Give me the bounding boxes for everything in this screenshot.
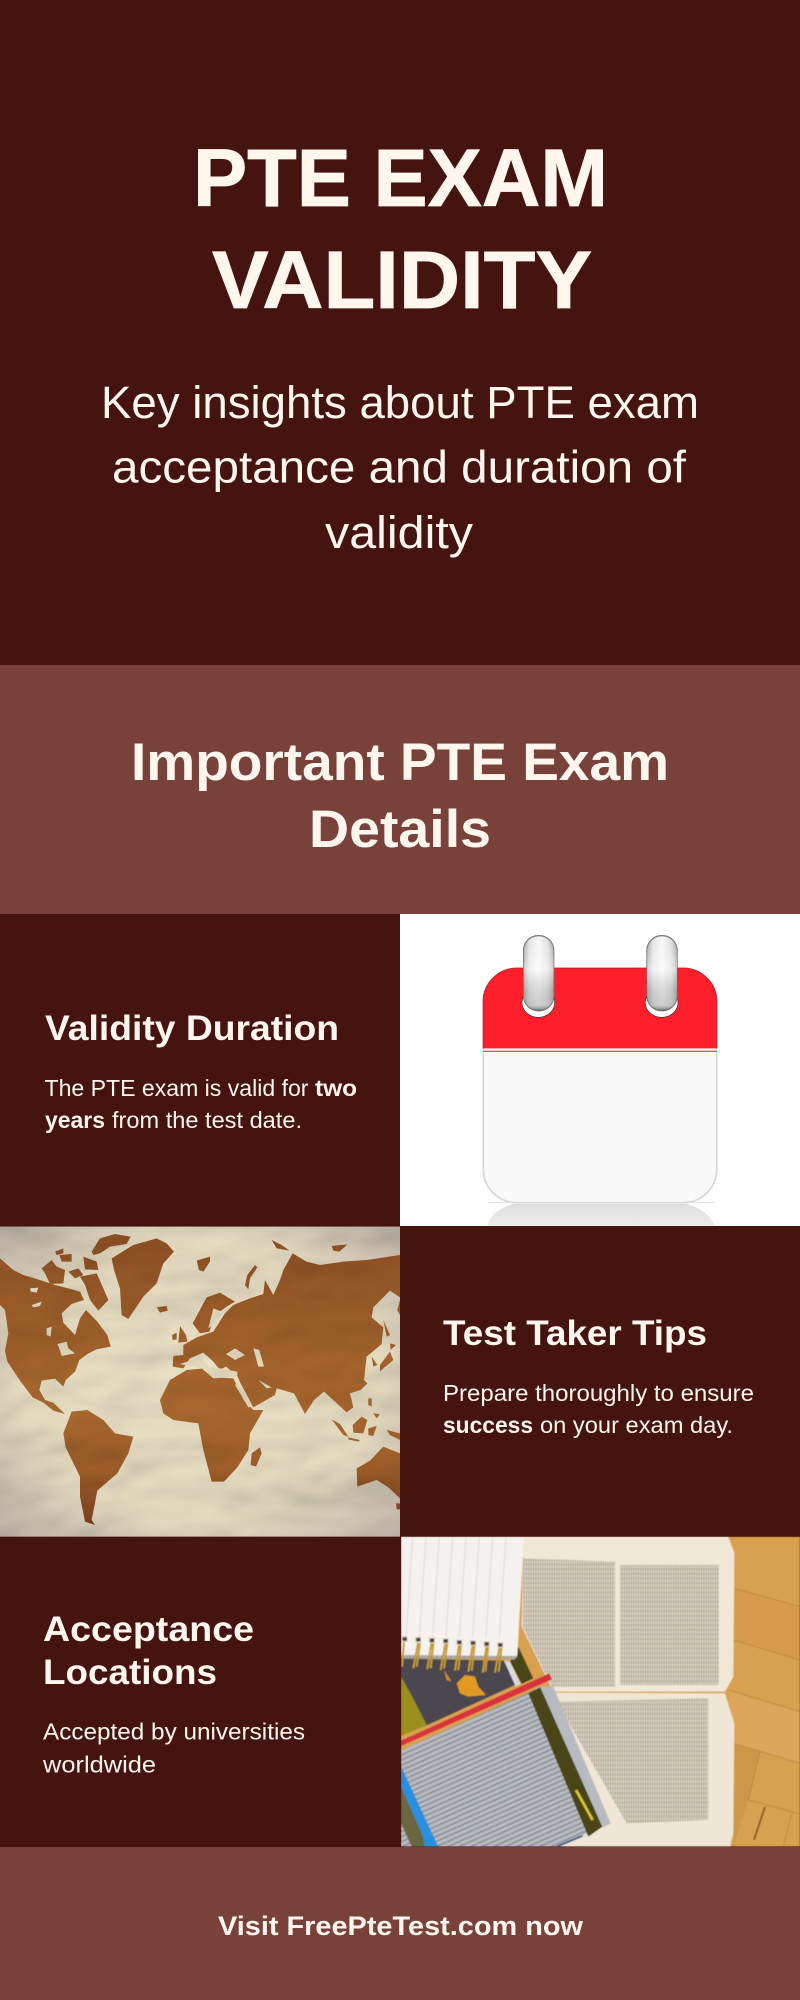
notebook spiral rings [402, 1642, 502, 1673]
text: test taker tips body: success [443, 1412, 533, 1438]
lower book gray page [401, 1686, 588, 1847]
subtitle: Key insights about PTE exam [101, 377, 699, 428]
heading: acceptance locations [43, 1610, 254, 1692]
panel: section heading band [0, 665, 800, 914]
south america [63, 1410, 133, 1525]
arctic islands [42, 1260, 65, 1284]
open book bottom page [550, 1693, 734, 1847]
text: test taker tips body: on your exam day. [540, 1412, 733, 1438]
scandinavia [193, 1293, 235, 1333]
africa [160, 1368, 263, 1482]
panel: validity duration [0, 914, 400, 1226]
text: validity duration body: two [315, 1075, 357, 1101]
panel: test taker tips [400, 1226, 800, 1537]
text: test taker tips body: Prepare thoroughly to ensure [443, 1380, 754, 1406]
heading: test taker tips: Test Taker Tips [443, 1314, 707, 1353]
icon: world map image [0, 1227, 400, 1537]
red pencil [401, 1673, 552, 1746]
heading: validity duration: Validity Duration [45, 1009, 339, 1048]
heading: acceptance locations: Locations [43, 1653, 217, 1692]
section heading: Details [309, 800, 491, 859]
photo on lower book [401, 1658, 515, 1735]
section heading: Important PTE Exam [131, 733, 669, 792]
text: validity duration body [44, 1075, 357, 1133]
british isles [172, 1326, 187, 1343]
madagascar [251, 1447, 262, 1467]
icon: calendar image [400, 914, 800, 1226]
panel: header background [0, 0, 800, 665]
icon: books and notebook image [401, 1537, 800, 1847]
text: acceptance locations body: Accepted by universities [43, 1718, 305, 1744]
blue photo strip [401, 1766, 438, 1847]
text: validity duration body: years [45, 1107, 105, 1133]
text: acceptance locations body: worldwide [42, 1752, 156, 1778]
section heading [131, 733, 669, 859]
subtitle [101, 377, 699, 558]
panel: acceptance locations [0, 1537, 401, 1847]
subtitle: acceptance and duration of [112, 442, 687, 492]
page text columns [523, 1558, 615, 1687]
subtitle: validity [325, 507, 474, 558]
text: test taker tips body [443, 1380, 754, 1438]
footer call to action: Visit FreePteTest.com now [218, 1911, 584, 1941]
title: PTE EXAM [193, 133, 608, 224]
australia [357, 1447, 400, 1498]
svalbard and other north islands [197, 1240, 347, 1272]
panel: footer [0, 1847, 800, 2000]
greenland [112, 1238, 174, 1319]
open book top page [522, 1537, 734, 1692]
iceland [157, 1306, 168, 1313]
title: VALIDITY [212, 235, 592, 326]
eurasia [173, 1253, 400, 1414]
text: validity duration body: from the test date. [112, 1107, 302, 1133]
southeast asia islands [332, 1398, 400, 1442]
title [193, 133, 608, 326]
north america [0, 1258, 111, 1414]
spiral notebook [401, 1537, 524, 1659]
text: acceptance locations body [42, 1718, 305, 1778]
heading: acceptance locations: Acceptance [43, 1610, 254, 1649]
japan and east islands [380, 1320, 396, 1372]
text: validity duration body: The PTE exam is valid for [44, 1075, 309, 1101]
olive spine [528, 1687, 603, 1837]
